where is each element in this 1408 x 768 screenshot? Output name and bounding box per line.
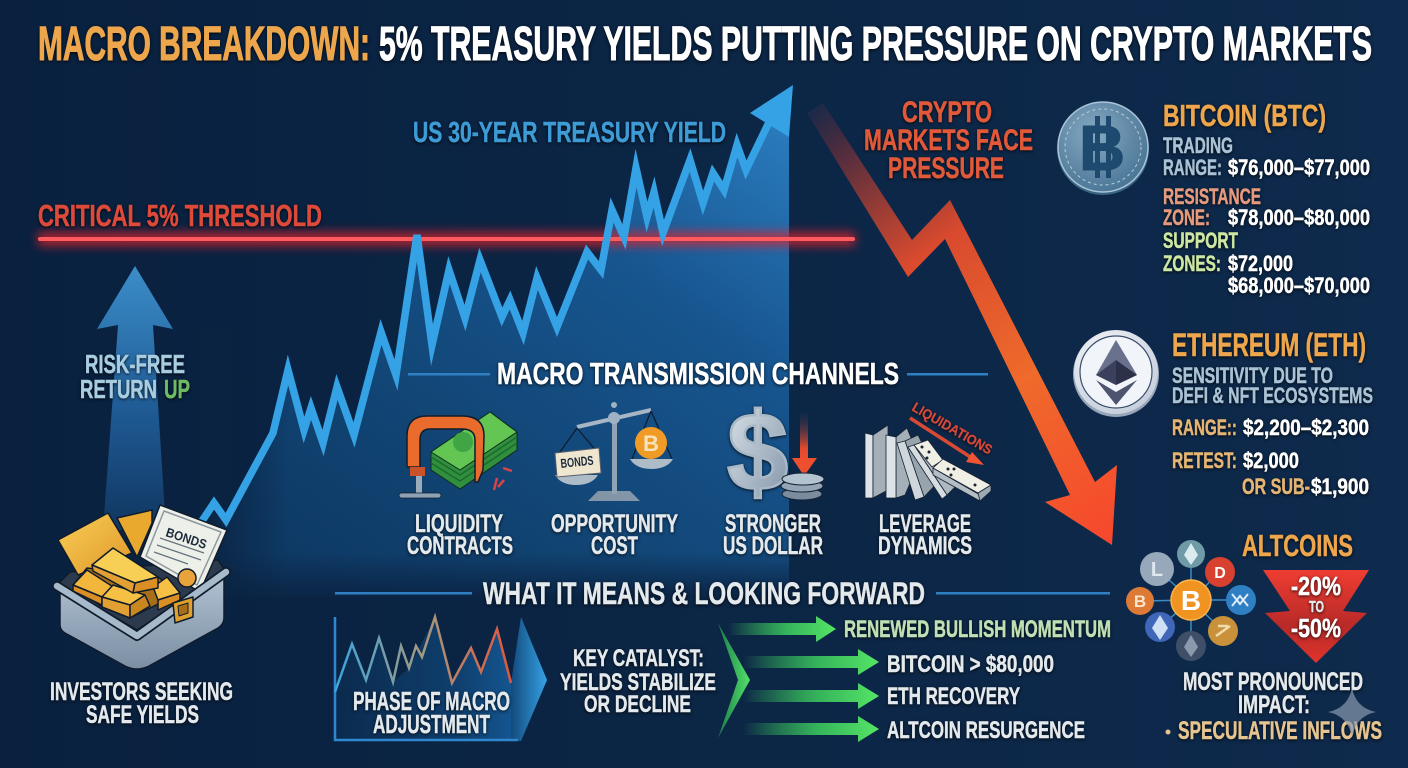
icon: balance scale with bonds and bitcoin — [555, 402, 673, 501]
icon: balance scale with bonds and bitcoin: B — [643, 431, 659, 456]
badge: minus 20 to minus 50 percent — [1263, 570, 1369, 663]
text: key catalyst: KEY CATALYST: — [573, 645, 704, 672]
text: key catalyst: YIELDS STABILIZE — [560, 669, 716, 696]
panel: bitcoin levels: $68,000–$70,000 — [1228, 273, 1370, 298]
panel: ethereum levels: RETEST: — [1172, 448, 1237, 473]
panel: bitcoin levels: RANGE: — [1163, 155, 1222, 180]
heading: what it means and looking forward: WHAT IT MEANS & LOOKING FORWARD — [483, 575, 925, 611]
icon: altcoin network: B — [1134, 592, 1146, 611]
label: liquidations arrow: LIQUIDATIONS — [910, 399, 995, 458]
badge: minus 20 to minus 50 percent: TO — [1309, 599, 1324, 616]
icon: bitcoin coin — [1057, 102, 1149, 195]
channel labels: COST — [591, 533, 638, 560]
title: MACRO BREAKDOWN: — [38, 18, 370, 71]
panel: phase of macro adjustment: ADJUSTMENT — [373, 709, 490, 739]
label: investors seeking safe yields: INVESTORS SEEKING — [50, 678, 233, 706]
channel labels: STRONGER — [725, 511, 821, 538]
icon: altcoin network: L — [1151, 559, 1163, 581]
critical threshold line — [38, 232, 855, 246]
icon: balance scale with bonds and bitcoin: BONDS — [560, 453, 594, 471]
text: key catalyst — [560, 645, 716, 718]
green chevron — [718, 623, 750, 738]
icon: altcoin network: B — [1181, 585, 1201, 616]
panel: ethereum levels: $2,200–$2,300 — [1243, 415, 1369, 440]
icon: stronger dollar: $ — [727, 391, 788, 514]
channel labels: CONTRACTS — [407, 533, 513, 560]
label: risk-free return up: UP — [164, 374, 190, 404]
icon: falling dominoes — [865, 425, 991, 501]
label: US 30-year treasury yield: US 30-YEAR TREASURY YIELD — [413, 117, 726, 149]
outcome arrows and labels: ALTCOIN RESURGENCE — [887, 717, 1085, 744]
panel: ethereum levels: RANGE:: — [1172, 415, 1237, 440]
panel: ethereum levels: $2,000 — [1243, 448, 1299, 473]
icon: stronger dollar — [727, 391, 824, 514]
panel: bitcoin levels: $78,000–$80,000 — [1228, 205, 1370, 230]
label: investors seeking safe yields: SAFE YIELDS — [86, 701, 199, 729]
badge: minus 20 to minus 50 percent: -50% — [1291, 613, 1341, 643]
channel labels: DYNAMICS — [878, 533, 972, 560]
panel: phase of macro adjustment: PHASE OF MACRO — [353, 686, 510, 716]
outcome arrows and labels — [728, 616, 1111, 744]
panel: ethereum levels — [1172, 327, 1373, 499]
outcome arrows and labels: BITCOIN > $80,000 — [887, 651, 1054, 678]
decorative sparkle mark — [1328, 688, 1376, 737]
panel: ethereum levels: SENSITIVITY DUE TO — [1172, 363, 1333, 388]
label: altcoins: ALTCOINS — [1242, 529, 1353, 563]
yield line chart with arrow — [200, 85, 793, 524]
icon: safe box with gold and bonds: BONDS — [164, 525, 209, 552]
icon: altcoin network: D — [1214, 565, 1226, 582]
icon: bitcoin coin: B — [1079, 112, 1125, 184]
panel: bitcoin levels: SUPPORT — [1163, 228, 1238, 253]
icon: altcoin network — [1126, 540, 1256, 661]
icon: clamp on money — [399, 412, 517, 498]
outcome arrows and labels: RENEWED BULLISH MOMENTUM — [844, 616, 1111, 643]
heading: macro transmission channels: MACRO TRANSMISSION CHANNELS — [497, 357, 899, 391]
channel labels: LEVERAGE — [879, 511, 971, 538]
badge: minus 20 to minus 50 percent: -20% — [1291, 571, 1341, 601]
icon: safe box with gold and bonds — [57, 505, 227, 669]
text: most pronounced impact: IMPACT: — [1238, 692, 1310, 719]
panel: ethereum levels: $1,900 — [1311, 474, 1369, 499]
label: investors seeking safe yields — [50, 678, 233, 729]
arrow: risk-free return up — [97, 266, 173, 530]
channel labels — [407, 511, 972, 560]
outcome arrows and labels: ETH RECOVERY — [887, 683, 1020, 710]
panel: bitcoin levels: BITCOIN (BTC) — [1163, 99, 1326, 133]
label: critical threshold: CRITICAL 5% THRESHOLD — [38, 199, 322, 233]
text: most pronounced impact — [1166, 669, 1382, 745]
panel: bitcoin levels: TRADING — [1163, 133, 1233, 158]
label: crypto markets face pressure: PRESSURE — [888, 152, 1004, 185]
icon: ethereum coin — [1073, 330, 1159, 417]
panel: bitcoin levels: RESISTANCE — [1163, 184, 1261, 209]
channel labels: US DOLLAR — [723, 533, 823, 560]
label: crypto markets face pressure: CRYPTO — [902, 96, 992, 129]
label: crypto markets face pressure: MARKETS FACE — [864, 124, 1033, 157]
panel: ethereum levels: OR SUB- — [1242, 474, 1310, 499]
text: key catalyst: OR DECLINE — [584, 691, 691, 718]
channel labels: OPPORTUNITY — [551, 511, 678, 538]
chart: yield area fill — [200, 100, 792, 598]
panel: bitcoin levels: $72,000 — [1228, 251, 1293, 276]
falling red arrow — [807, 103, 1117, 545]
label: risk-free return up: RETURN — [80, 374, 157, 404]
label: risk-free return up — [80, 349, 190, 404]
label: risk-free return up: RISK-FREE — [85, 349, 185, 379]
label: crypto markets face pressure — [864, 96, 1033, 185]
channel labels: LIQUIDITY — [415, 511, 503, 538]
panel: bitcoin levels: ZONE: — [1163, 205, 1210, 230]
panel: bitcoin levels: $76,000–$77,000 — [1228, 155, 1370, 180]
panel: bitcoin levels — [1163, 99, 1370, 298]
panel: phase of macro adjustment — [334, 617, 547, 741]
panel: bitcoin levels: ZONES: — [1163, 251, 1221, 276]
